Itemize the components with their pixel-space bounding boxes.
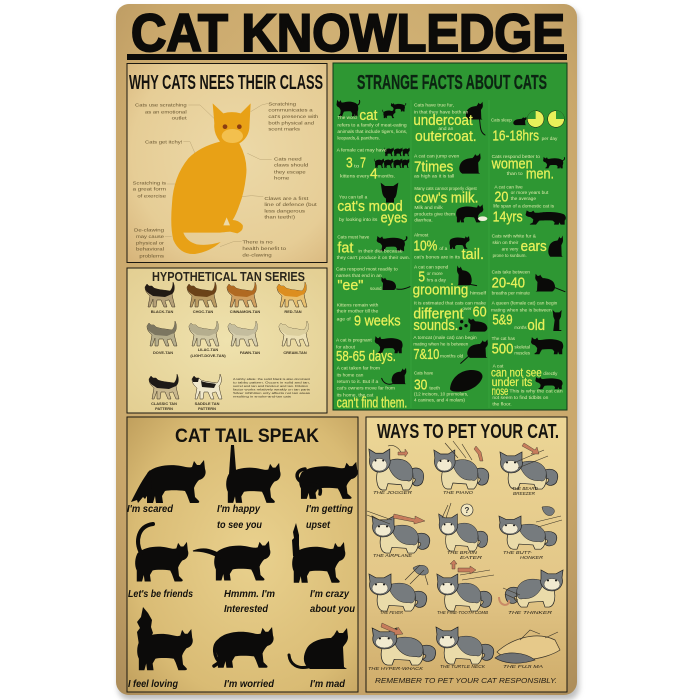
fact: under nose [491, 364, 563, 407]
fact: teeth: (12 incisors, 10 premolars, [414, 392, 468, 397]
title: CAT KNOWLEDGE [131, 4, 565, 63]
illustration: orange cat with callouts: outlet [172, 115, 188, 120]
fact: women [491, 154, 565, 182]
fact: teeth: 30 [414, 377, 427, 393]
cat: choc-tan [187, 282, 217, 314]
fact: grooming: 5 [418, 270, 425, 286]
illustration: orange cat with callouts: home [274, 175, 290, 180]
cat: black-tan: BLACK-TAN [151, 309, 173, 314]
tan series note: A tabby allele: the solid black is also dominant [233, 377, 310, 381]
pet: the airplane: THE AIRPLANE [373, 553, 413, 558]
fact: pregnant: A cat is pregnant [336, 338, 372, 343]
pet: the butt-honker [499, 507, 562, 560]
cat: lilac-tan: LILAC-TAN [198, 347, 218, 352]
cat: fawn-tan: FAWN-TAN [240, 350, 260, 355]
pet: the thinker: THE THINKER [508, 610, 553, 615]
fact: lifespan: life span of a domestic cat is [493, 204, 555, 209]
pet: the turtle neck: THE TURTLE NECK [440, 664, 486, 669]
cat: happy [217, 445, 281, 531]
cat: saddle tan pattern: SADDLE TAN [195, 401, 220, 406]
pet: the piano: THE PIANO [443, 490, 474, 495]
cat: happy: to see you [217, 520, 262, 531]
fact: milk: products give them [414, 211, 455, 216]
heading: strange facts: STRANGE FACTS ABOUT CATS [357, 72, 547, 94]
cat: crazy about you: about you [310, 604, 355, 615]
fact: sounds: over [462, 306, 472, 311]
illustration: orange cat with callouts: line of defence (but [264, 202, 318, 207]
fact: tomcat: A tomcat (male cat) can begin [413, 335, 477, 340]
fact: far from home: can't find them. [337, 396, 407, 412]
cat: getting upset: I'm getting [306, 504, 353, 515]
fact: names: sound. [370, 286, 383, 291]
cat: getting upset: upset [306, 520, 331, 531]
illustration: orange cat with callouts: less dangerous [264, 208, 306, 213]
fact: lifespan: 20 [494, 190, 508, 206]
fact: ears [492, 234, 563, 258]
cat: saddle tan pattern: PATTERN [198, 406, 216, 411]
cat: classic tan pattern: CLASSIC TAN [151, 401, 177, 406]
cat: red-tan [277, 282, 307, 314]
heading: ways to pet: WAYS TO PET YOUR CAT. [377, 421, 559, 443]
fact: breaths: 20-40 [492, 275, 525, 291]
illustration: orange cat with callouts: cat's presence with [268, 114, 319, 119]
fact: lifespan: the average [511, 196, 536, 201]
illustration: orange cat with callouts: Cats need [274, 157, 302, 162]
illustration: orange cat with callouts: physical or [136, 240, 165, 245]
tan series note [233, 377, 311, 398]
fact: grooming: hrs a day [427, 278, 447, 283]
illustration: orange cat with callouts: Scratching [268, 101, 297, 106]
fact: fat: they can't produce it on their own. [337, 255, 410, 260]
illustration: orange cat with callouts: they escape [274, 169, 306, 174]
fact: tail bones: of a [439, 246, 448, 251]
pet: the brain eater: THE BRAIN [447, 550, 478, 555]
fact: far from home: return to it. But if a [337, 379, 379, 384]
fact: undercoat: outercoat. [415, 129, 477, 145]
cat: friends [128, 524, 193, 600]
fact: pregnant [336, 336, 403, 365]
cat: worried [214, 627, 275, 690]
fact: milk: Milk and milk [414, 205, 443, 210]
fact: queen: mating when she is between [491, 308, 552, 313]
fact: ears: prone to sunburn. [493, 253, 527, 258]
illustration: orange cat with callouts: health benefit to [242, 246, 287, 251]
fact: kittens: to [354, 163, 360, 168]
fact: breaths [492, 269, 565, 295]
illustration: orange cat with callouts: There is no [242, 239, 273, 244]
fact: lifespan: 14yrs [493, 210, 523, 226]
fact: teeth: teeth [429, 385, 440, 390]
cat: cinnamon-tan: CINNAMON-TAN [230, 309, 260, 314]
pet: the fever [369, 565, 428, 615]
fact: sounds [413, 300, 487, 334]
fact: teeth: 4 canines, and 4 molars) [414, 398, 465, 403]
fact: milk: cow's milk. [414, 190, 478, 206]
pet: the fever: THE FEVER [380, 610, 404, 615]
illustration: orange cat with callouts: both physical and [268, 120, 315, 125]
fact: 9 weeks: their mother till the [337, 309, 379, 314]
illustration: orange cat with callouts: a great form [133, 187, 166, 192]
cat: lilac-tan [189, 321, 226, 358]
illustration: orange cat with callouts: Scratching is [133, 180, 167, 185]
pet: the butt-honker: THE BUTT- [503, 550, 533, 555]
fact: lifespan: or more years but [511, 190, 549, 195]
fact: mood: eyes [381, 210, 407, 226]
cat: loving: I feel loving [128, 679, 178, 690]
illustration: orange cat with callouts: Cats get itchy! [145, 139, 182, 144]
fact: mood [337, 183, 407, 226]
cat: cream-tan: CREAM-TAN [283, 350, 307, 355]
fact: names: Cats respond most readily to [336, 267, 398, 272]
panel: hypothetical tan series [127, 268, 327, 413]
fact: far from home: its home, the cat [337, 392, 374, 397]
illustration: orange cat with callouts: as an emotional [145, 109, 187, 114]
fact: kittens: 3 [346, 155, 353, 171]
illustration: orange cat with callouts: De-clawing [134, 228, 165, 233]
fact: word cat: cat [359, 108, 377, 124]
fact: far from home: its home can [337, 372, 364, 377]
cat: interested: Interested [224, 604, 269, 615]
fact: queen: months [514, 325, 527, 330]
fact: women: than to [507, 171, 523, 176]
pet: the beard breezer: BREEZER [513, 491, 536, 496]
illustration: orange cat with callouts: scent marks [268, 127, 301, 132]
pet: the turtle neck [436, 627, 494, 669]
cat: classic tan pattern: PATTERN [155, 406, 173, 411]
illustration: orange cat with callouts: than teeth!) [264, 215, 296, 220]
fact: queen: 5&9 [492, 312, 513, 328]
fact: milk: diarrhea. [414, 218, 433, 223]
fact: milk: Many cats cannot properly digest [414, 186, 477, 191]
fact: women: men. [526, 166, 554, 182]
fact: fat: in their diet because [358, 248, 403, 253]
illustration: orange cat with callouts [133, 101, 319, 258]
illustration: orange cat with callouts: problems [139, 253, 165, 258]
cat: cinnamon-tan [227, 282, 260, 314]
fact: ears: Cats with white fur & [492, 234, 537, 239]
cat: loving [128, 607, 193, 690]
fact: 9 weeks: age of [337, 317, 351, 322]
fact: undercoat: and an [438, 126, 454, 131]
fact: fat: Cats must have [337, 234, 370, 239]
illustration: orange cat with callouts: behavioral [136, 247, 164, 252]
fact: kittens: 4 [370, 166, 378, 182]
fact: tomcat: months old [440, 354, 464, 359]
fact: grooming: himself [470, 290, 487, 295]
illustration: orange cat with callouts: of exercise [137, 193, 167, 198]
pet: the airplane [367, 511, 430, 558]
fact: pregnant: for about [336, 344, 356, 349]
fact: 9 weeks [337, 303, 401, 330]
fact: mood: You can tell a [339, 195, 368, 200]
fact: under nose: under its [492, 375, 532, 389]
cat: friends: Let's be friends [128, 589, 193, 600]
pet: the fine-tooth comb: THE FINE-TOOTH COMB [437, 610, 488, 615]
fact: under nose: This is why the cat can [509, 389, 563, 394]
cat: saddle tan pattern [192, 374, 222, 411]
panel: why cats need their claws [127, 64, 327, 262]
fact: undercoat: in that they have both an [414, 109, 469, 114]
cat: lilac-tan: (LIGHT-DOVE-TAN) [190, 353, 226, 358]
cat: choc-tan: CHOC-TAN [193, 309, 213, 314]
fact: tail bones [413, 233, 484, 263]
fact: under nose: can not see [491, 366, 542, 380]
fact: undercoat: undercoat [413, 113, 473, 129]
fact: jump: as high as it is tall [414, 174, 454, 179]
illustration: orange cat with callouts: Claws are a first [264, 196, 309, 201]
illustration: orange cat with callouts: Cats use scratching [135, 103, 187, 108]
fact: kittens [337, 147, 410, 182]
fact: tomcat: 7&10 [413, 347, 439, 363]
heading: tan series: HYPOTHETICAL TAN SERIES [152, 269, 305, 284]
cat: mad [289, 628, 348, 690]
fact: muscles: skeletal [514, 344, 530, 349]
fact: under nose: A cat [493, 364, 504, 369]
cat: classic tan pattern [149, 374, 179, 411]
pet: the jogger [369, 445, 424, 495]
fact: tail bones: Almost [414, 233, 429, 238]
cat: getting upset [297, 462, 358, 531]
fact: kittens: kittens every [340, 173, 370, 178]
fact: mood: cat's mood [337, 199, 403, 215]
fact: under nose: the floor. [492, 402, 512, 407]
cat: fawn-tan [228, 321, 260, 355]
fact: sleep: per day [542, 136, 558, 141]
fact: word cat [337, 100, 407, 140]
fact: muscles: 500 [492, 341, 513, 357]
fact: grooming: grooming [413, 282, 468, 298]
fact: muscles: The cat has [492, 336, 516, 341]
fact: ears: skin on their [492, 240, 519, 245]
fact: kittens: 7 [360, 155, 366, 171]
fact: sounds: sounds. [413, 318, 458, 334]
fact: ears: are very [502, 247, 519, 252]
fact: lifespan [493, 184, 566, 226]
closing note: REMEMBER TO PET YOUR CAT RESPONSIBLY. [375, 678, 557, 685]
fact: teeth [414, 370, 482, 403]
pet: the brain eater: ? [465, 506, 470, 515]
pet: the full ma [495, 630, 560, 669]
fact: far from home: cat's owners move far from [337, 386, 395, 391]
tan series note: Silver inhibition only affects not tan areas [233, 391, 311, 395]
fact: far from home [337, 366, 407, 412]
fact: 9 weeks: 9 weeks [354, 314, 401, 330]
fact: kittens: months. [378, 173, 395, 178]
fact: jump [414, 153, 481, 179]
fact: undercoat: Cats have true fur, [414, 103, 454, 108]
panel: cat tail speak [127, 417, 358, 692]
cat: scared [127, 460, 206, 515]
fact: tail bones: cat's bones are in its [414, 254, 461, 259]
illustration: orange cat with callouts: de-clawing [242, 253, 272, 258]
cat: happy: I'm happy [217, 504, 260, 515]
fact: undercoat [413, 102, 485, 145]
fact: tomcat [413, 335, 488, 363]
heading: cat tail speak: CAT TAIL SPEAK [175, 425, 319, 447]
metal sign plate [116, 4, 579, 700]
cat: interested [193, 541, 275, 615]
pet: the hyper-whack: THE HYPER-WHACK [368, 666, 424, 671]
fact: teeth: Cats have [414, 370, 434, 375]
cat: dove-tan [147, 321, 177, 355]
fact: names: "ee" [337, 278, 363, 294]
cat: crazy about you [292, 523, 355, 615]
fact: mood: by looking into its [339, 217, 378, 222]
cat: interested: Hmmm. I'm [224, 589, 275, 600]
tan series note: sorrel and tan and bicolour and tan. Dilution [233, 384, 308, 388]
fact: grooming: or more [427, 271, 443, 276]
cat: scared: I'm scared [127, 504, 174, 515]
pet: the beard breezer: THE BEARD [512, 486, 539, 491]
illustration: orange cat with callouts: may cause [136, 234, 165, 239]
fact: jump: 7times [414, 160, 453, 176]
fact: tail bones: tail. [462, 247, 484, 263]
fact: kittens: A female cat may have [337, 147, 387, 152]
fact: fat [337, 234, 410, 260]
fact: sleep [491, 111, 564, 145]
illustration: orange cat with callouts: communicates a [268, 108, 313, 113]
fact: word cat: leopards,& panthers. [337, 135, 380, 140]
fact: tomcat: mating when he is between [413, 342, 469, 347]
fact: far from home: A cat taken far from [337, 366, 380, 371]
fact: under nose: nose [492, 384, 509, 398]
fact: sounds: different [413, 306, 463, 322]
fact: grooming: A cat can spend [414, 264, 449, 269]
tan series note: factor works relatively weakly on tan parts [233, 388, 311, 392]
panel: ways to pet your cat [366, 417, 567, 692]
fact: muscles: muscles [514, 350, 531, 355]
pet: the beard breezer [500, 443, 558, 496]
pet: the thinker [499, 570, 563, 615]
pet: the piano [434, 441, 489, 495]
cat: crazy about you: I'm crazy [310, 589, 349, 600]
fact: milk [414, 186, 487, 223]
fact: fat: fat [337, 241, 353, 257]
illustration: orange cat with callouts: claws should [274, 163, 309, 168]
fact: muscles [492, 336, 563, 357]
fact: queen: A queen (female cat) can begin [492, 300, 558, 305]
fact: sounds: 60 [473, 305, 487, 321]
fact: under nose: not seem to find tidbits on [492, 395, 549, 400]
pet: the brain eater [439, 503, 488, 560]
cat: cream-tan [279, 321, 309, 355]
fact: breaths: Cats take between [492, 269, 530, 274]
pet: the butt-honker: HONKER [520, 555, 544, 560]
pet: the brain eater: EATER [460, 555, 483, 560]
fact: word cat: refers to a family of meat-eating [337, 122, 407, 127]
pet: the hyper-whack [368, 623, 436, 671]
fact: grooming [413, 264, 487, 298]
fact: names: names that end in an [336, 273, 382, 278]
panel: strange facts about cats [333, 63, 567, 412]
pet: the fine-tooth comb [437, 560, 494, 615]
cat: red-tan: RED-TAN [284, 309, 302, 314]
tan series note: resulting in smoke-and-tan cats [233, 394, 292, 398]
fact: queen [491, 300, 562, 334]
cat: worried: I'm worried [224, 679, 275, 690]
fact: word cat: The word [337, 115, 357, 120]
fact: queen: old [527, 318, 545, 334]
fact: sounds: It is estimated that cats can make [414, 300, 486, 305]
fact: pregnant: 58-65 days. [336, 349, 396, 365]
fact: 9 weeks: Kittens remain with [337, 303, 379, 308]
heading: why cats: WHY CATS NEES THEIR CLASS [129, 72, 323, 94]
fact: sleep: 16-18hrs [492, 129, 539, 145]
fact: names [336, 267, 410, 294]
cat: mad: I'm mad [310, 679, 346, 690]
fact: women: Cats respond better to [492, 154, 540, 159]
fact: lifespan: A cat can live [494, 184, 523, 189]
pet: the jogger: THE JOGGER [373, 490, 413, 495]
cat: black-tan [145, 282, 175, 314]
fact: jump: A cat can jump even [414, 154, 460, 159]
fact: ears: ears [521, 239, 547, 255]
fact: women: women [491, 156, 533, 172]
fact: tail bones: 10% [413, 239, 437, 255]
tan series note: to tabby pattern. Occurs in solid and tan, [233, 380, 310, 384]
pet: the full ma: THE FUJI MA [503, 664, 543, 669]
fact: under nose: directly [543, 371, 558, 376]
fact: breaths: breaths per minute [492, 290, 530, 295]
cat: dove-tan: DOVE-TAN [153, 350, 173, 355]
fact: word cat: animals that include tigers, lions, [337, 129, 407, 134]
fact: sleep: Cats sleep [491, 118, 512, 123]
